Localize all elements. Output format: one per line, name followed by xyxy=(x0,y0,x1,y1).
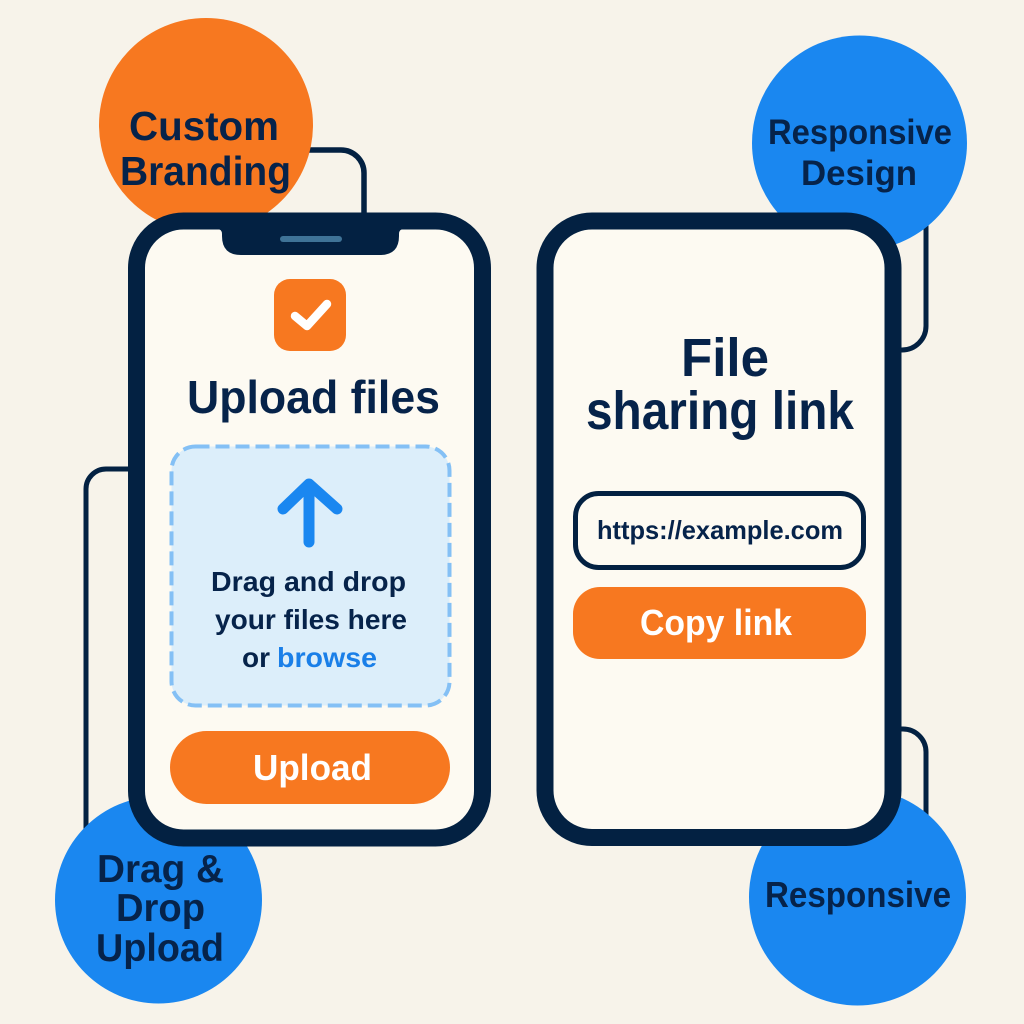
badge circle: responsive design xyxy=(752,36,967,250)
label: drag and drop upload xyxy=(96,848,224,970)
phone: file sharing link xyxy=(545,221,893,838)
label: drag and drop upload: Drag & xyxy=(97,848,224,891)
heading: file sharing link xyxy=(586,328,855,441)
drop zone text: or xyxy=(242,642,270,673)
button: copy link: Copy link xyxy=(640,602,793,643)
label: responsive design xyxy=(768,113,952,193)
connector: responsive design to sharing phone xyxy=(896,225,926,350)
url field: https://example.com xyxy=(597,515,843,545)
drop zone text xyxy=(211,566,407,673)
badge circle: drag and drop upload xyxy=(55,796,262,1004)
label: responsive: Responsive xyxy=(765,874,951,915)
badge circle: responsive xyxy=(749,788,966,1006)
button: upload: Upload xyxy=(253,747,372,788)
label: drag and drop upload: Upload xyxy=(96,927,224,970)
drop zone text: browse xyxy=(277,642,377,673)
drop zone xyxy=(172,446,450,706)
connector: custom branding to upload phone xyxy=(306,150,364,220)
heading: file sharing link: File xyxy=(681,328,769,388)
label: custom branding: Custom xyxy=(129,103,279,149)
label: drag and drop upload: Drop xyxy=(116,887,205,930)
button: upload xyxy=(170,731,450,804)
phone body xyxy=(136,221,482,838)
label: custom branding: Branding xyxy=(120,148,291,194)
connector: drag and drop to upload phone xyxy=(86,469,134,830)
phone body xyxy=(545,221,893,838)
phone: upload files xyxy=(136,221,482,838)
label: custom branding xyxy=(120,103,291,194)
notch speaker xyxy=(280,236,342,242)
url field xyxy=(576,494,864,568)
icon: orange check badge xyxy=(274,279,346,351)
label: responsive design: Design xyxy=(801,154,917,193)
label: responsive design: Responsive xyxy=(768,113,952,152)
drop zone text: Drag and drop xyxy=(211,566,406,597)
icon: upload arrow xyxy=(283,484,337,542)
badge circle: custom branding xyxy=(99,18,313,232)
heading: upload files: Upload files xyxy=(187,371,440,423)
phone notch xyxy=(214,225,407,255)
heading: file sharing link: sharing link xyxy=(586,381,855,441)
connector: responsive to sharing phone xyxy=(896,729,926,830)
drop zone text: your files here xyxy=(215,604,407,635)
button: copy link xyxy=(573,587,866,659)
